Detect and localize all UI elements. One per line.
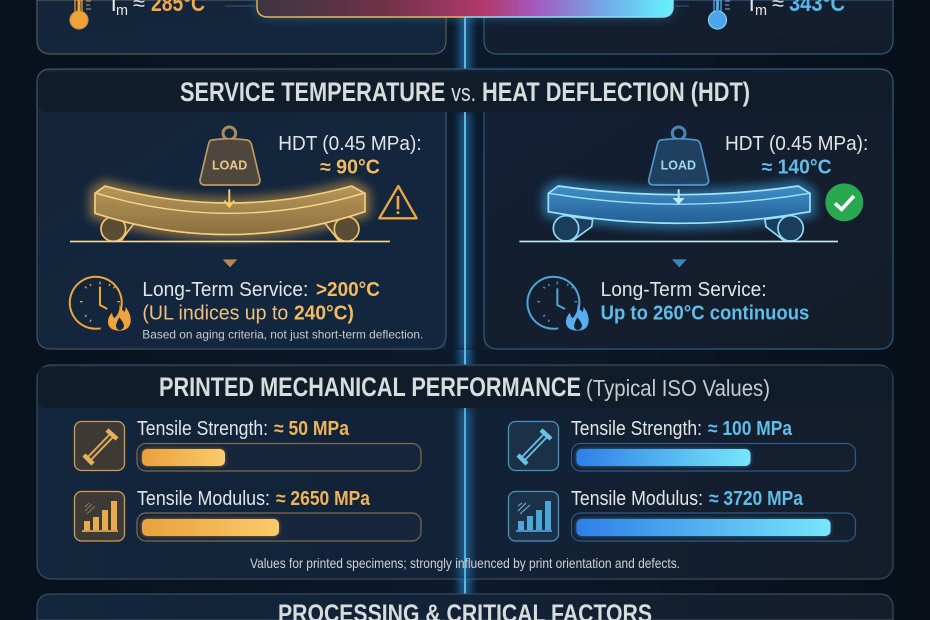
column: left HDT diagram — [70, 127, 423, 341]
long-term service value: Up to 260°C continuous — [601, 302, 809, 324]
icon: load weight: LOAD — [661, 158, 696, 172]
arrow: load direction — [676, 189, 682, 203]
HDT label: HDT (0.45 MPa): — [725, 133, 868, 155]
panel: processing and critical factors — [37, 594, 893, 620]
melting range gradient bar — [225, 0, 689, 17]
icon: warning triangle — [379, 186, 417, 218]
long-term service value: >200°C — [316, 279, 380, 301]
icon: amber tensile specimen — [74, 422, 124, 470]
sub-panel: right background — [465, 69, 893, 349]
marker triangle — [223, 259, 237, 267]
panel: top left melting temperature — [37, 0, 446, 54]
supports — [101, 217, 359, 241]
panel: top right melting temperature — [484, 0, 893, 54]
column: right HDT diagram — [519, 127, 868, 331]
icon: clock with flame — [527, 277, 589, 331]
header strip — [38, 72, 892, 112]
blue tensile modulus label: Tensile Modulus: — [571, 488, 703, 510]
UL indices value: 240°C) — [294, 302, 354, 324]
beam under load — [519, 186, 838, 242]
panel: service temperature vs heat deflection — [37, 69, 893, 350]
HDT value: ≈ 90°C — [320, 156, 380, 178]
footnote: Based on aging criteria, not just short-term deflection. — [142, 328, 423, 341]
icon: clock with flame — [70, 277, 131, 331]
header strip — [38, 367, 892, 408]
panel background — [37, 365, 893, 579]
icon: amber modulus chart — [74, 492, 124, 541]
icon: blue modulus chart — [508, 492, 558, 541]
heading: SERVICE TEMPERATURE vs. HEAT DEFLECTION (HDT) — [180, 77, 750, 107]
amber modulus bar — [137, 513, 421, 541]
amber strength bar — [137, 444, 421, 471]
UL indices text: (UL indices up to — [142, 302, 288, 324]
melting temperature value: m — [755, 2, 767, 19]
blue tensile modulus value: ≈ 3720 MPa — [709, 488, 804, 510]
icon: load weight: LOAD — [212, 158, 247, 172]
blue tensile strength label: Tensile Strength: — [571, 418, 702, 440]
blue tensile strength value: ≈ 100 MPa — [708, 418, 793, 440]
support line — [519, 241, 838, 242]
central divider line — [459, 14, 471, 620]
marker triangle — [672, 259, 687, 267]
long-term service text: Long-Term Service: — [601, 279, 767, 301]
gap around divider — [446, 112, 484, 350]
sub-panel outline: left — [37, 69, 465, 349]
supports — [553, 216, 803, 241]
blue strength bar — [572, 444, 856, 471]
icon: load weight — [649, 127, 709, 185]
divider glow inside panel — [459, 408, 471, 580]
HDT value: ≈ 140°C — [762, 156, 832, 178]
panel: printed mechanical performance — [37, 365, 893, 580]
amber tensile modulus label: Tensile Modulus: — [137, 488, 270, 510]
icon: amber thermometer — [70, 0, 91, 29]
melting temperature value: m — [116, 2, 128, 19]
melting temperature value — [745, 0, 845, 19]
icon: load weight — [200, 127, 260, 185]
icon: green check — [825, 183, 863, 221]
icon: blue thermometer — [708, 0, 730, 29]
HDT label: HDT (0.45 MPa): — [278, 133, 422, 155]
sub-panel: left background — [37, 69, 465, 349]
footnote: Values for printed specimens; strongly influenced by print orientation and defects. — [250, 555, 680, 571]
amber tensile strength value: ≈ 50 MPa — [274, 418, 350, 440]
icon: blue tensile specimen — [508, 422, 558, 470]
beam under load — [70, 186, 390, 242]
heading: PRINTED MECHANICAL PERFORMANCE — [159, 372, 581, 402]
blue modulus bar — [572, 513, 856, 541]
melting temperature value — [107, 0, 205, 19]
arrow: load direction — [224, 189, 234, 207]
heading note: (Typical ISO Values) — [586, 375, 770, 401]
amber tensile modulus value: ≈ 2650 MPa — [276, 488, 371, 510]
amber tensile strength label: Tensile Strength: — [137, 418, 268, 440]
sub-panel outline: right — [465, 69, 893, 349]
long-term service text: Long-Term Service: — [142, 279, 308, 301]
support line — [70, 241, 390, 242]
